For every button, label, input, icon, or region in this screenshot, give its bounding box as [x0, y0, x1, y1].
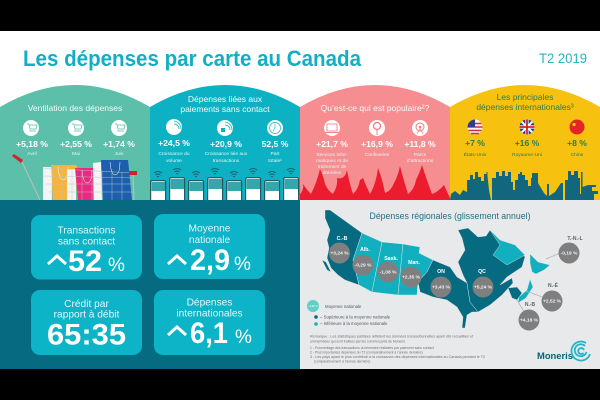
June value — [103, 139, 135, 157]
region: QC: QC — [478, 269, 486, 275]
card: crédit par rapport à débit — [31, 290, 142, 355]
value: États-Unis — [464, 138, 487, 158]
region: T.-N.-L — [558, 236, 583, 264]
icon: ferris wheel — [412, 120, 428, 136]
card: crédit par rapport à débit: Crédit par — [64, 299, 109, 310]
map of Canada — [322, 210, 550, 328]
card: moyenne nationale: 2,9 — [190, 244, 230, 277]
panel: dépenses internationales — [450, 85, 600, 200]
heading: Dépenses liées aux — [188, 94, 263, 104]
value: services informatiques: traitement de — [318, 164, 347, 170]
legend: Moyenne nationale — [325, 304, 362, 309]
footnotes: Remarque : Les statistiques publiées reflètent les données transactionnelles ayant été recueillies et — [310, 334, 473, 338]
card: transactions sans contact: sans contact — [58, 236, 115, 248]
card: dépenses internationales: % — [235, 327, 252, 348]
footnotes: 1 - Pourcentage des transactions du trimestre réalisées par paiement sans contact — [310, 346, 434, 350]
region: N.-É — [542, 281, 562, 312]
logo: Moneris: Moneris — [537, 351, 573, 362]
legend: – Inférieure à la moyenne nationale — [320, 321, 388, 326]
heading: paiements sans contact — [180, 104, 270, 114]
card: dépenses internationales: Dépenses — [187, 298, 232, 308]
share value: Part — [271, 151, 280, 157]
card: transactions sans contact: 52 — [68, 245, 102, 278]
transactions value: +20,9 % — [210, 139, 242, 149]
region: ON: ON — [437, 269, 445, 275]
value: Royaume-Uni: +16 % — [515, 138, 540, 148]
heading: Ventilation des dépenses — [28, 103, 122, 113]
value: Royaume-Uni — [512, 138, 542, 158]
region: N.-B: N.-B — [525, 302, 536, 308]
card: crédit par rapport à débit: rapport à débit — [54, 310, 120, 320]
April value: +5,18 % — [16, 139, 48, 149]
value: services informatiques: +21,7 % — [316, 139, 348, 149]
May value: +2,55 % — [60, 139, 92, 149]
footnotes — [310, 334, 485, 364]
legend: – Supérieure à la moyenne nationale — [320, 314, 391, 320]
footnotes: 3 - Les pays ayant le plus contribué à la croissance des dépenses internationales au Canada pendant le T2 — [310, 355, 485, 359]
value: États-Unis: États-Unis — [464, 151, 487, 158]
value: parcs d'attractions — [404, 139, 436, 164]
value: Chine: Chine — [571, 152, 584, 158]
volume value: +24,5 % — [158, 138, 190, 148]
illustration: skyline — [450, 171, 598, 200]
June value: +1,74 % — [103, 139, 135, 149]
transactions value — [205, 139, 248, 164]
region: Sask.: -1,08 % — [380, 270, 397, 276]
value: Royaume-Uni: Royaume-Uni — [512, 152, 542, 158]
heading: dépenses internationales³ — [476, 102, 574, 112]
April value — [16, 139, 48, 157]
legend — [307, 300, 391, 326]
region: C.-B.: C.-B — [337, 236, 348, 242]
heading — [180, 94, 270, 114]
footnotes: anonymisées qui sont traitées par les commerçants de Moneris. — [310, 340, 406, 344]
heading: Qu’est-ce qui est populaire²? — [321, 103, 430, 113]
value: services informatiques: matiques et de — [316, 158, 348, 164]
period label: T2 2019 — [539, 51, 587, 66]
icon: transactions — [217, 120, 233, 136]
panel: ventilation des dépenses — [0, 85, 150, 200]
transactions value: Croissance liée aux — [205, 151, 248, 157]
card: transactions sans contact — [31, 215, 142, 280]
region: T.-N.-L: -0,19 % — [561, 251, 578, 257]
value: services informatiques — [316, 139, 348, 176]
region: Alb.: Alb. — [360, 247, 370, 253]
region: QC: +5,24 % — [474, 285, 493, 291]
value: confiseries: Confiseries — [365, 152, 390, 158]
card: crédit par rapport à débit: 65:35 — [47, 318, 126, 352]
illustration: flames — [300, 165, 450, 200]
logo: Moneris — [537, 342, 590, 362]
legend: +2,92 % — [308, 305, 318, 308]
region: N.-B — [518, 302, 540, 330]
card: moyenne nationale: nationale — [189, 235, 231, 246]
icon: clock — [267, 120, 283, 136]
value: États-Unis: +7 % — [465, 138, 485, 148]
region: N.-B: +4,18 % — [520, 318, 539, 324]
value: Chine: +8 % — [567, 138, 587, 148]
region: C.-B.: +3,24 % — [330, 251, 349, 257]
region: Sask.: Sask. — [384, 256, 398, 262]
value: services informatiques: données — [323, 170, 342, 176]
panel: dépenses régionales — [300, 200, 600, 369]
panel: national statistics — [0, 200, 300, 369]
region: N.-É: +2,52 % — [543, 299, 562, 305]
region: Alb. — [352, 247, 374, 276]
value: parcs d'attractions: d’attractions — [407, 158, 434, 164]
icon: UK flag — [520, 120, 534, 134]
share value: 52,5 % — [262, 139, 289, 149]
panel: paiements sans contact — [150, 85, 300, 203]
share value: totale¹ — [268, 158, 282, 164]
icon: basket June — [111, 120, 127, 136]
region: ON: +3,43 % — [432, 285, 451, 291]
May value: Mai — [72, 151, 80, 157]
transactions value: transactions — [213, 158, 240, 164]
value: Chine — [567, 138, 587, 158]
card: moyenne nationale: Moyenne — [189, 224, 231, 234]
region: Alb.: -0,29 % — [355, 263, 372, 269]
volume value — [158, 138, 190, 164]
illustration: shopping cart with bags — [12, 154, 137, 200]
share value — [262, 139, 289, 164]
heading: Les principales — [497, 92, 553, 102]
region: T.-N.-L: T.-N.-L — [567, 236, 583, 242]
heading: Dépenses régionales (glissement annuel) — [370, 211, 530, 222]
card: transactions sans contact: % — [108, 255, 125, 276]
card: dépenses internationales: 6,1 — [190, 317, 228, 350]
May value — [60, 139, 92, 157]
card: dépenses internationales — [154, 290, 265, 355]
icon: basket April — [23, 120, 39, 136]
region: Sask. — [378, 256, 398, 282]
region: Man.: Man. — [408, 260, 420, 266]
heading — [476, 92, 574, 112]
connector lines — [517, 253, 560, 315]
card: moyenne nationale: % — [234, 254, 251, 275]
region: QC — [472, 269, 494, 298]
icon: basket May — [68, 120, 84, 136]
volume value: Croissance du — [158, 151, 190, 157]
icon: volume — [166, 119, 182, 135]
value: services informatiques: Services infor- — [316, 152, 348, 158]
icon: lollipop — [369, 120, 385, 136]
footnotes: (comparativement à l’année dernière) — [314, 360, 370, 364]
value: confiseries — [361, 139, 393, 158]
value: confiseries: +16,9 % — [361, 139, 393, 149]
region: Man. — [400, 260, 422, 288]
region: C.-B. — [329, 236, 350, 264]
panel: populaire — [300, 85, 450, 200]
icon: China flag — [570, 120, 584, 134]
region: ON — [430, 269, 452, 298]
value: parcs d'attractions: +11,8 % — [404, 139, 436, 149]
card: dépenses internationales: internationales — [176, 308, 243, 320]
volume value: volume — [166, 158, 182, 164]
June value: Juin — [115, 151, 124, 157]
illustration: row of phones — [151, 168, 299, 203]
region: N.-É: N.-É — [548, 281, 559, 289]
footnotes: 2 - Plus importantes dépenses du T2 (comparativement à l’année dernière) — [310, 350, 423, 354]
icon: computer — [324, 120, 340, 136]
April value: Avril — [27, 151, 37, 157]
icon: US flag — [468, 120, 482, 134]
card: transactions sans contact: Transactions — [58, 226, 115, 236]
value: parcs d'attractions: Parcs — [414, 152, 427, 158]
card: moyenne nationale — [154, 214, 265, 279]
region: Man.: +2,35 % — [402, 275, 421, 281]
title: Les dépenses par carte au Canada — [23, 46, 362, 71]
